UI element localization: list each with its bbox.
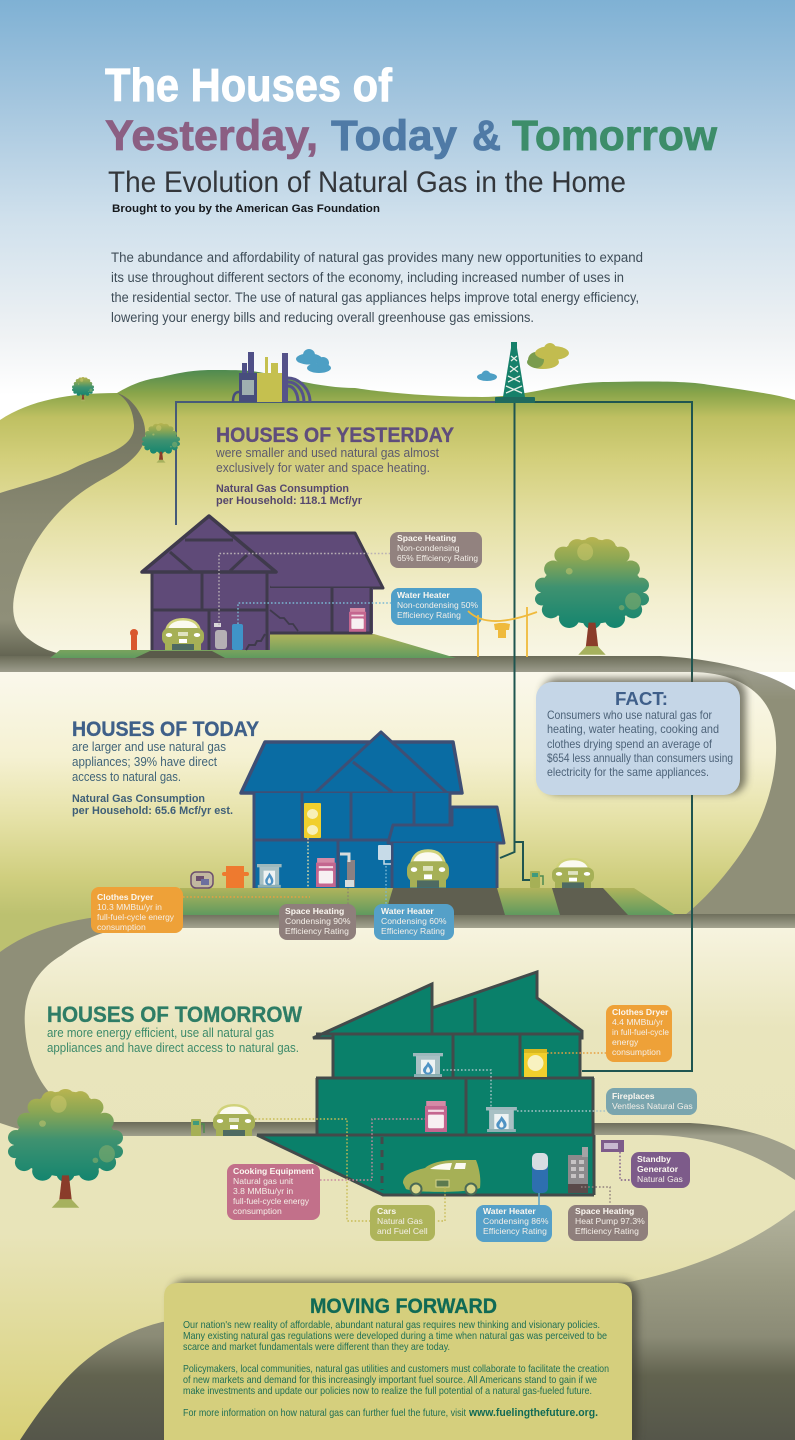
callout: space heating, today: Efficiency Rating	[285, 926, 349, 936]
title: Yesterday, Today & Tomorrow: Today	[331, 112, 457, 160]
callout: fireplaces: Ventless Natural Gas	[612, 1101, 693, 1111]
callout: standby generator	[631, 1152, 690, 1188]
callout: water heater, today: Water Heater	[381, 906, 434, 916]
dotted links, yesterday	[219, 554, 391, 625]
driveway, yesterday	[135, 651, 225, 658]
callout: water heater, yesterday	[391, 588, 482, 625]
icon: clothesline	[468, 607, 537, 657]
panel: moving forward: make investments and update our policies now to realize the full potential of a natural gas-fueled future.	[183, 1385, 592, 1397]
icon: standby generator box	[601, 1140, 624, 1152]
callout: standby generator: Natural Gas	[637, 1174, 683, 1184]
small tree on hilltop	[72, 377, 94, 401]
horizontal road, today	[100, 914, 795, 928]
callout: clothes dryer, tomorrow	[606, 1005, 672, 1062]
icon: gas meter hydrant	[130, 629, 138, 650]
panel: moving forward: Our nation's new reality of affordable, abundant natural gas requires new thinking and visionary policies.	[183, 1319, 600, 1331]
gas pipeline network	[176, 402, 692, 1071]
callout: space heating, yesterday: Non-condensing	[397, 543, 460, 553]
callout: clothes dryer, today: full-fuel-cycle energy	[97, 912, 175, 922]
icon: factory	[233, 352, 310, 402]
callout: water heater, yesterday: Efficiency Rating	[397, 610, 461, 620]
icon: water heater gray tank	[214, 623, 227, 649]
dotted links, today	[183, 838, 386, 904]
text: tomorrow description: are more energy efficient, use all natural gas	[47, 1025, 274, 1040]
callout: cars: Cars	[377, 1206, 396, 1216]
horizontal road, tomorrow	[95, 1122, 320, 1136]
panel: moving forward	[164, 1283, 632, 1440]
icon: stove, today	[316, 858, 336, 887]
icon: gas meter, today	[191, 872, 213, 888]
callout: fireplaces: Fireplaces	[612, 1091, 655, 1101]
bottom dark hill	[20, 1210, 795, 1440]
grass mound, yesterday	[50, 634, 456, 658]
text: today consumption: Natural Gas Consumption	[72, 793, 205, 805]
text: tomorrow description: appliances and have direct access to natural gas.	[47, 1040, 299, 1055]
text: yesterday description	[215, 445, 439, 475]
panel: moving forward: of new markets and demand for this increasingly important fuel source. All Americans stand to gain if we	[183, 1374, 597, 1386]
heading: Houses of Today: HOUSES OF TODAY	[72, 718, 259, 741]
panel: moving forward: www.fuelingthefuture.org.	[468, 1407, 598, 1419]
panel: moving forward: For more information on how natural gas can further fuel the future, visit	[183, 1407, 466, 1419]
callout: space heating, today: Condensing 90%	[285, 916, 351, 926]
heading: Houses of Tomorrow: HOUSES OF TOMORROW	[47, 1002, 302, 1027]
title: The Houses of: The Houses of	[105, 59, 393, 111]
panel: fact: heating, water heating, cooking and	[547, 722, 719, 736]
callout: space heating, tomorrow	[568, 1205, 648, 1241]
callout: cars: and Fuel Cell	[377, 1226, 428, 1236]
text: today consumption	[72, 793, 233, 817]
callout: water heater, tomorrow: Condensing 86%	[483, 1216, 549, 1226]
icon: stacked dryer	[304, 803, 321, 838]
icon: clothes dryer, tomorrow	[524, 1049, 547, 1077]
panel: moving forward shadow	[170, 1280, 638, 1440]
callout: clothes dryer, tomorrow: consumption	[612, 1047, 661, 1057]
house of today	[241, 732, 504, 888]
subtitle: The Evolution of Natural Gas in the Home	[108, 166, 626, 199]
callout: clothes dryer, tomorrow: Clothes Dryer	[612, 1007, 669, 1017]
callout: clothes dryer, tomorrow: in full-fuel-cycle	[612, 1027, 669, 1037]
callout: clothes dryer, today	[91, 887, 183, 933]
large tree, tomorrow	[8, 1089, 123, 1208]
house of yesterday	[142, 516, 383, 650]
panel: fact: Consumers who use natural gas for	[547, 708, 712, 722]
callout: space heating, tomorrow: Heat Pump 97.3%	[575, 1216, 645, 1226]
panel: moving forward: Policymakers, local communities, natural gas utilities and customers must collaborate to facilitate the creation	[183, 1363, 609, 1375]
icon: car at pump, tomorrow	[213, 1104, 255, 1136]
icon: small blue cloud	[477, 370, 497, 381]
intro paragraph: its use throughout different sectors of the economy, including increased number of uses in	[111, 270, 624, 285]
callout: water heater, tomorrow	[476, 1205, 552, 1242]
intro paragraph	[111, 250, 643, 325]
text: today description: access to natural gas.	[72, 769, 181, 784]
icon: water tank, tomorrow	[532, 1153, 548, 1193]
today ground	[0, 672, 776, 960]
callout: standby generator: Generator	[637, 1164, 679, 1174]
credit line: Brought to you by the American Gas Foundation	[112, 203, 380, 215]
horizontal road, yesterday, and right road band curve	[0, 656, 795, 928]
panel: fact: electricity for the same appliances.	[547, 765, 709, 779]
callout: space heating, yesterday	[390, 532, 482, 568]
text: today description: appliances; 39% have direct	[72, 754, 217, 769]
icon: car, garage side view	[403, 1160, 480, 1194]
icon: car, today	[407, 849, 449, 888]
text: yesterday description: exclusively for water and space heating.	[216, 460, 430, 475]
intro paragraph: lowering your energy bills and reducing overall greenhouse gas emissions.	[111, 310, 534, 325]
callout: clothes dryer, tomorrow: 4.4 MMBtu/yr	[612, 1017, 663, 1027]
panel: fact: FACT:	[615, 689, 668, 709]
icon: yellow cloud	[527, 343, 569, 369]
winding road, upper	[0, 393, 145, 672]
callout: clothes dryer, today: 10.3 MMBtu/yr in	[97, 902, 162, 912]
callout: space heating, tomorrow: Space Heating	[575, 1206, 634, 1216]
callout: fireplaces	[606, 1088, 697, 1115]
callout: space heating, tomorrow: Efficiency Rating	[575, 1226, 639, 1236]
panel: moving forward: Many existing natural gas regulations were developed during a time when natural gas was perceived to be	[183, 1330, 607, 1342]
icon: tankless water heater	[378, 845, 391, 864]
icon: blue water tank	[232, 624, 243, 650]
house of tomorrow	[257, 972, 594, 1195]
callout: cooking equipment: 3.8 MMBtu/yr in	[233, 1186, 293, 1196]
text: today description	[72, 739, 226, 784]
icon: stove, tomorrow	[425, 1101, 447, 1132]
callout: space heating, yesterday: Space Heating	[397, 533, 456, 543]
title: Yesterday, Today & Tomorrow: Tomorrow	[512, 112, 718, 160]
callout: space heating, today	[279, 904, 356, 940]
winding road, left connector	[0, 914, 320, 1135]
callout: space heating, yesterday: 65% Efficiency Rating	[397, 553, 478, 563]
callout: cooking equipment: consumption	[233, 1206, 282, 1216]
callout: cooking equipment: full-fuel-cycle energy	[233, 1196, 310, 1206]
tomorrow ground	[0, 925, 795, 1440]
road curve, tomorrow right	[590, 1123, 795, 1180]
icon: gas derrick	[495, 342, 535, 403]
callout: standby generator: Standby	[637, 1154, 671, 1164]
callout: clothes dryer, today: consumption	[97, 922, 146, 932]
title: Yesterday, Today & Tomorrow: Yesterday,	[105, 112, 318, 160]
text: yesterday consumption: Natural Gas Consumption	[216, 483, 349, 495]
panel: fact shadow	[542, 678, 746, 794]
callout: cars: Natural Gas	[377, 1216, 423, 1226]
text: yesterday consumption	[216, 483, 363, 507]
callout: water heater, yesterday: Non-condensing 50%	[397, 600, 478, 610]
icon: car, yesterday	[162, 618, 204, 650]
intro paragraph: the residential sector. The use of natural gas appliances helps improve total energy efficiency,	[111, 290, 639, 305]
icon: fireplace, today	[257, 864, 282, 888]
callout: cooking equipment: Cooking Equipment	[233, 1166, 314, 1176]
callout: clothes dryer, today: Clothes Dryer	[97, 892, 154, 902]
dotted links, tomorrow	[255, 1053, 631, 1221]
icon: gas pump, tomorrow	[191, 1119, 204, 1136]
text: today description: are larger and use natural gas	[72, 739, 226, 754]
callout: water heater, today: Efficiency Rating	[381, 926, 445, 936]
panel: fact: clothes drying spend an average of	[547, 737, 713, 751]
panel: moving forward: MOVING FORWARD	[310, 1295, 497, 1318]
driveways, today	[385, 888, 628, 915]
text: today consumption: per Household: 65.6 Mcf/yr est.	[72, 805, 233, 817]
panel: fact	[536, 682, 740, 795]
intro paragraph: The abundance and affordability of natural gas provides many new opportunities to expand	[111, 250, 643, 265]
panel: fact: $654 less annually than consumers using	[547, 751, 733, 765]
icon: fireplace, upper floor	[413, 1053, 443, 1077]
tree on road bend	[142, 423, 180, 463]
callout: clothes dryer, tomorrow: energy	[612, 1037, 639, 1047]
rolling hills, yesterday ground	[0, 370, 795, 672]
icon: furnace, today	[340, 854, 355, 887]
callout: water heater, tomorrow: Efficiency Rating	[483, 1226, 547, 1236]
title: Yesterday, Today & Tomorrow	[105, 112, 718, 160]
icon: orange heat unit	[222, 866, 249, 888]
grass strip, today	[180, 888, 675, 915]
icon: stove, yesterday	[349, 608, 366, 632]
callout: water heater, tomorrow: Water Heater	[483, 1206, 536, 1216]
large tree, yesterday	[535, 537, 649, 655]
callout: water heater, today	[374, 904, 454, 940]
callout: cooking equipment	[227, 1164, 320, 1220]
title: Yesterday, Today & Tomorrow: &	[472, 112, 501, 160]
icon: gas pump, today	[530, 871, 543, 888]
icon: car at pump, today	[552, 858, 594, 888]
text: tomorrow description	[47, 1025, 299, 1055]
text: yesterday consumption: per Household: 118.1 Mcf/yr	[216, 495, 363, 507]
callout: water heater, today: Condensing 60%	[381, 916, 447, 926]
callout: space heating, today: Space Heating	[285, 906, 344, 916]
callout: cars	[370, 1205, 435, 1241]
sky background	[0, 0, 795, 395]
callout: water heater, yesterday: Water Heater	[397, 590, 450, 600]
panel: moving forward: scarce and market fundamentals were different than they are today.	[183, 1341, 450, 1353]
text: yesterday description: were smaller and used natural gas almost	[215, 445, 439, 460]
icon: fireplace, middle floor	[486, 1107, 517, 1132]
callout: cooking equipment: Natural gas unit	[233, 1176, 294, 1186]
icon: blue cloud	[296, 349, 331, 373]
heading: Houses of Yesterday: HOUSES OF YESTERDAY	[216, 424, 454, 447]
icon: heat pump unit	[568, 1147, 588, 1193]
